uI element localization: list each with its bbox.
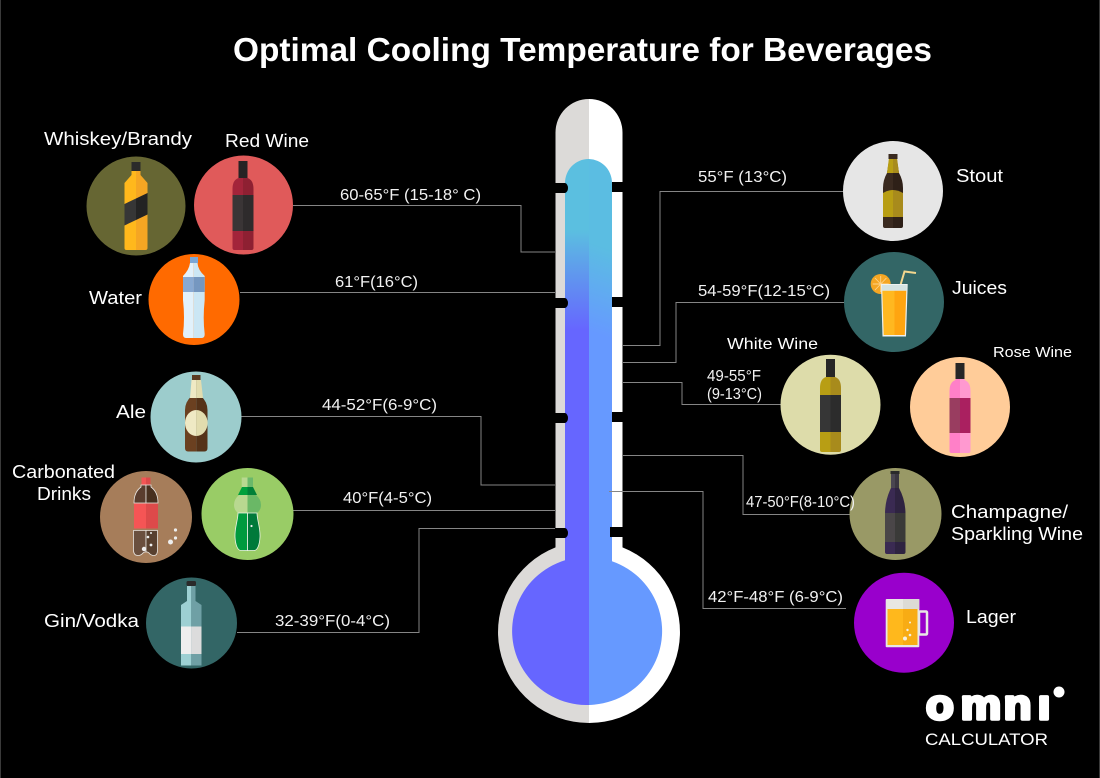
item: gin/vodka — [44, 578, 237, 668]
temperature labels: 42°F-48°F (6-9°C) — [708, 589, 843, 606]
item: champagne/sparkling wine: Sparkling Wine — [951, 524, 1083, 544]
logo: omni calculator: omni — [926, 682, 1050, 729]
temperature labels: 49-55°F — [707, 368, 761, 385]
item: lager: Lager — [966, 607, 1016, 627]
temperature labels: 47-50°F(8-10°C) — [746, 494, 855, 511]
item: stout: Stout — [956, 166, 1003, 186]
item: lager — [854, 573, 1016, 673]
item: white wine — [727, 336, 880, 455]
item: carbonated drinks — [12, 462, 294, 563]
item: stout — [843, 141, 1003, 241]
item: red wine: Red Wine — [225, 131, 309, 151]
temperature labels: 54-59°F(12-15°C) — [698, 283, 830, 300]
leader lines — [237, 192, 850, 632]
item: champagne/sparkling wine: Champagne/ — [951, 502, 1068, 522]
temperature labels: 61°F(16°C) — [335, 274, 418, 291]
item: carbonated drinks: Carbonated — [12, 462, 115, 482]
logo: omni calculator — [925, 670, 1064, 749]
item: rose wine — [910, 344, 1072, 457]
temperature labels: 40°F(4-5°C) — [343, 490, 432, 507]
item: ale — [116, 372, 242, 462]
item: gin/vodka: Gin/Vodka — [44, 611, 140, 631]
item: red wine — [194, 131, 309, 254]
temperature labels: (9-13°C) — [707, 386, 762, 403]
soda bottle — [234, 478, 261, 550]
item: ale: Ale — [116, 402, 146, 422]
thermometer — [498, 99, 680, 723]
item: juices — [844, 252, 1007, 352]
temperature labels: 44-52°F(6-9°C) — [322, 397, 437, 414]
item: whiskey/brandy — [44, 129, 192, 256]
item: white wine: White Wine — [727, 336, 818, 353]
temperature labels: 32-39°F(0-4°C) — [275, 613, 390, 630]
item: rose wine: Rose Wine — [993, 344, 1072, 361]
temperature labels — [275, 169, 855, 630]
item: carbonated drinks: Drinks — [37, 484, 91, 504]
item: champagne/sparkling wine — [850, 468, 1083, 560]
item: water — [89, 254, 240, 345]
title: Optimal Cooling Temperature for Beverages — [233, 31, 932, 68]
item: juices: Juices — [952, 278, 1007, 298]
logo: omni calculator: CALCULATOR — [925, 731, 1048, 749]
item: water: Water — [89, 288, 142, 308]
temperature labels: 60-65°F (15-18° C) — [340, 187, 481, 204]
temperature labels: 55°F (13°C) — [698, 169, 787, 186]
cola bottle — [134, 478, 177, 556]
item: whiskey/brandy: Whiskey/Brandy — [44, 129, 192, 149]
